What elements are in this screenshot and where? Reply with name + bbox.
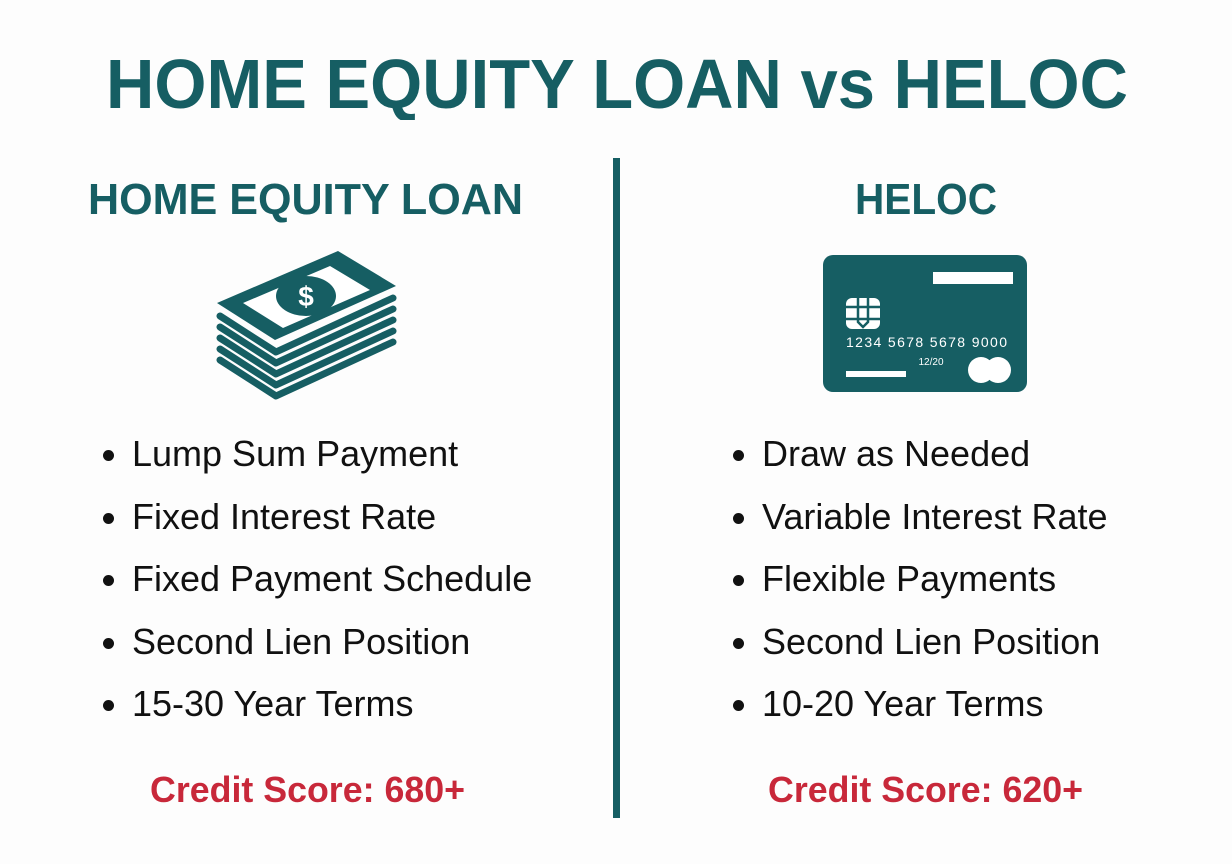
- list: heloc features: Variable Interest Rate: [762, 496, 1108, 537]
- icon: money stack: [216, 251, 396, 400]
- heading: home equity loan: HOME EQUITY LOAN: [88, 175, 523, 224]
- icon: money stack: $: [298, 281, 314, 312]
- list: heloc features: Flexible Payments: [762, 558, 1056, 599]
- icon: credit card: [823, 255, 1027, 392]
- list: loan features: Fixed Interest Rate: [132, 496, 436, 537]
- list: heloc features: 10-20 Year Terms: [762, 683, 1044, 724]
- list: heloc features: Draw as Needed: [762, 433, 1030, 474]
- icon: credit card: 12/20: [918, 357, 944, 368]
- icon: credit card: 1234 5678 5678 9000: [846, 334, 1007, 350]
- list: loan features: 15-30 Year Terms: [132, 683, 414, 724]
- panel: heloc: [733, 175, 1108, 810]
- panel: home equity loan: [88, 175, 532, 810]
- heading: heloc: HELOC: [855, 175, 997, 224]
- credit score: loan: Credit Score: 680+: [150, 769, 465, 810]
- divider: [613, 158, 620, 818]
- list: heloc features: Second Lien Position: [762, 621, 1100, 662]
- list: loan features: Second Lien Position: [132, 621, 470, 662]
- list: loan features: Lump Sum Payment: [132, 433, 458, 474]
- list: loan features: [103, 433, 532, 724]
- credit score: heloc: Credit Score: 620+: [768, 769, 1083, 810]
- list: loan features: Fixed Payment Schedule: [132, 558, 532, 599]
- list: heloc features: [733, 433, 1108, 724]
